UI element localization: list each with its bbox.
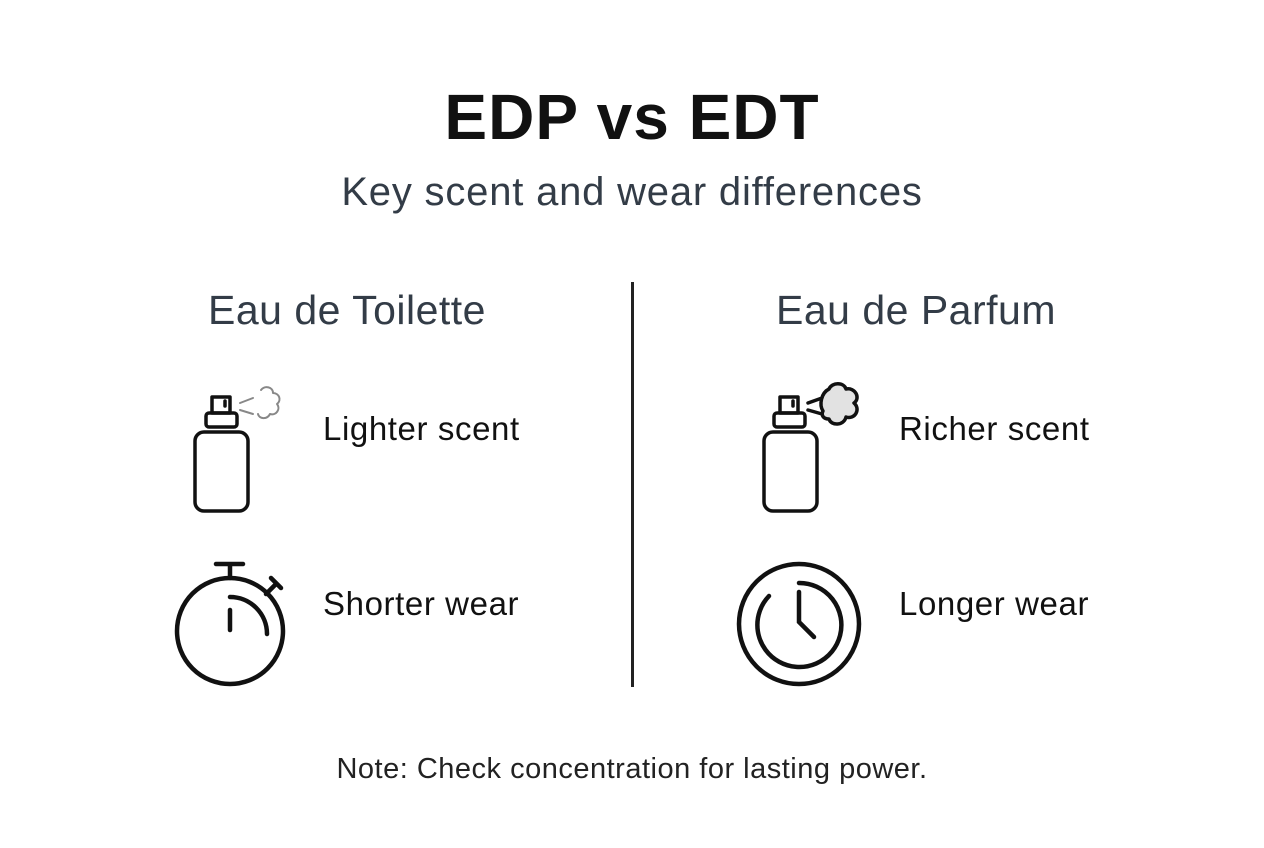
heading: Eau de Toilette: Eau de Toilette bbox=[208, 287, 486, 333]
text: Longer wear: Longer wear bbox=[899, 585, 1089, 622]
subtitle: Key scent and wear differences bbox=[341, 170, 923, 214]
text: Richer scent: Richer scent bbox=[899, 410, 1090, 447]
divider bbox=[631, 282, 634, 687]
icon: rich spray bottle bbox=[762, 382, 859, 513]
text: Lighter scent: Lighter scent bbox=[323, 410, 520, 447]
note: Note: Check concentration for lasting power. bbox=[336, 753, 928, 785]
icon: clock bbox=[736, 562, 862, 686]
title: EDP vs EDT bbox=[444, 81, 820, 153]
icon: stopwatch bbox=[174, 562, 286, 686]
text: Shorter wear: Shorter wear bbox=[323, 585, 519, 622]
heading: Eau de Parfum: Eau de Parfum bbox=[776, 287, 1056, 333]
icon: light spray bottle bbox=[193, 386, 280, 513]
